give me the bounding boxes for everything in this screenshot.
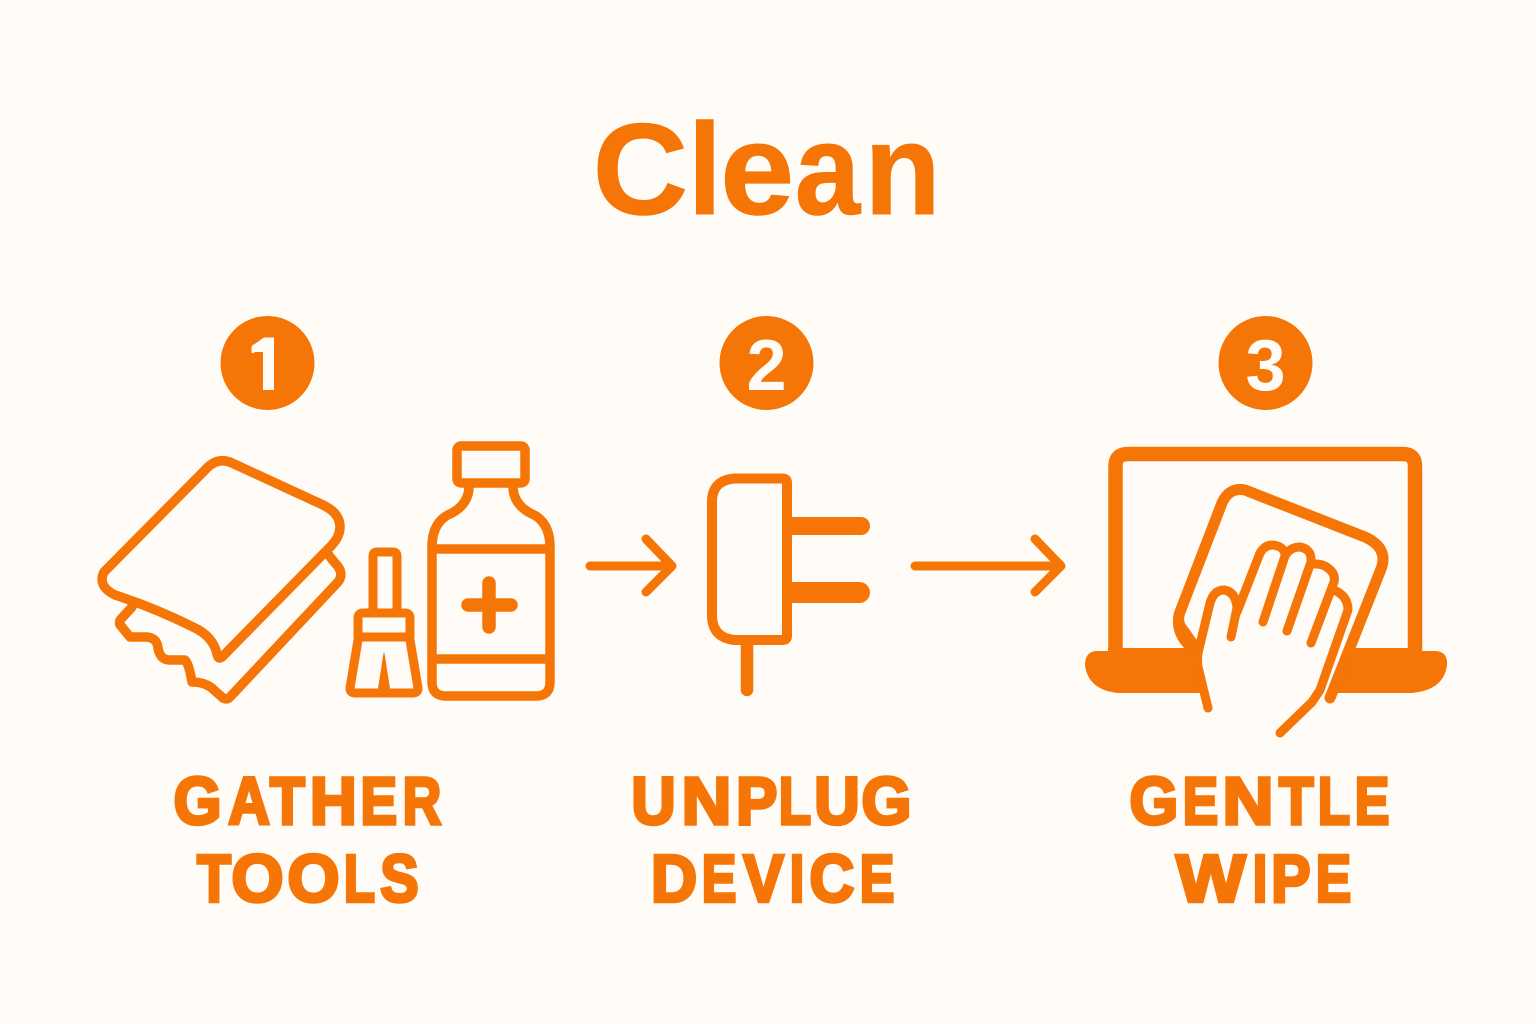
label: unplug device: P xyxy=(736,764,777,839)
badge: step 2: 2 xyxy=(746,326,787,406)
icon: plug xyxy=(712,478,870,690)
label: unplug device: C xyxy=(809,842,854,916)
label: gather tools: O xyxy=(287,842,339,916)
badge: step 1: 1 xyxy=(246,322,289,407)
label: gather tools xyxy=(174,764,441,916)
label: unplug device: N xyxy=(682,764,731,839)
label: unplug device: U xyxy=(814,764,860,839)
label: gather tools: O xyxy=(231,842,283,916)
label: unplug device: U xyxy=(631,764,676,839)
label: gather tools: T xyxy=(197,842,231,916)
label: unplug device xyxy=(631,764,911,916)
label: gather tools: L xyxy=(344,842,375,916)
title: e xyxy=(720,96,794,242)
label: gentle wipe xyxy=(1130,764,1389,916)
icon: brush xyxy=(350,552,418,693)
icon: bottle xyxy=(432,446,550,696)
title: C xyxy=(593,96,688,242)
arrow: step 2 to 3 xyxy=(915,539,1061,592)
label: gather tools: R xyxy=(403,764,441,839)
label: gentle wipe: T xyxy=(1279,764,1314,839)
label: gather tools: H xyxy=(310,764,357,839)
label: unplug device: I xyxy=(790,842,804,916)
title: a xyxy=(795,96,862,242)
label: gather tools: G xyxy=(174,764,222,839)
icon: cloth xyxy=(102,461,341,699)
label: gather tools: S xyxy=(380,842,419,916)
arrow: step 1 to 2 xyxy=(590,539,672,592)
label: unplug device: E xyxy=(860,842,894,916)
label: unplug device: V xyxy=(743,842,784,916)
label: unplug device: E xyxy=(702,842,736,916)
label: gentle wipe: E xyxy=(1316,842,1351,916)
label: gentle wipe: E xyxy=(1355,764,1389,839)
label: gather tools: T xyxy=(270,764,305,839)
label: gentle wipe: E xyxy=(1183,764,1218,839)
label: gather tools: A xyxy=(228,764,270,839)
title: n xyxy=(864,96,941,242)
label: gentle wipe: N xyxy=(1222,764,1274,839)
label: gentle wipe: L xyxy=(1318,764,1350,839)
label: gather tools: E xyxy=(361,764,397,839)
icon: hand with cloth xyxy=(1173,490,1383,733)
badge: step 1 xyxy=(220,316,314,410)
label: unplug device: D xyxy=(651,842,697,916)
label: unplug device: G xyxy=(862,764,911,839)
label: gentle wipe: G xyxy=(1130,764,1178,839)
label: unplug device: L xyxy=(779,764,811,839)
badge: step 3 xyxy=(1218,316,1312,410)
badge: step 2 xyxy=(720,316,814,410)
title: l xyxy=(688,96,722,242)
badge: step 3: 3 xyxy=(1245,326,1286,406)
label: gentle wipe: I xyxy=(1253,842,1267,916)
label: gentle wipe: W xyxy=(1176,842,1246,916)
label: gentle wipe: P xyxy=(1271,842,1310,916)
icon: laptop xyxy=(1085,454,1447,693)
